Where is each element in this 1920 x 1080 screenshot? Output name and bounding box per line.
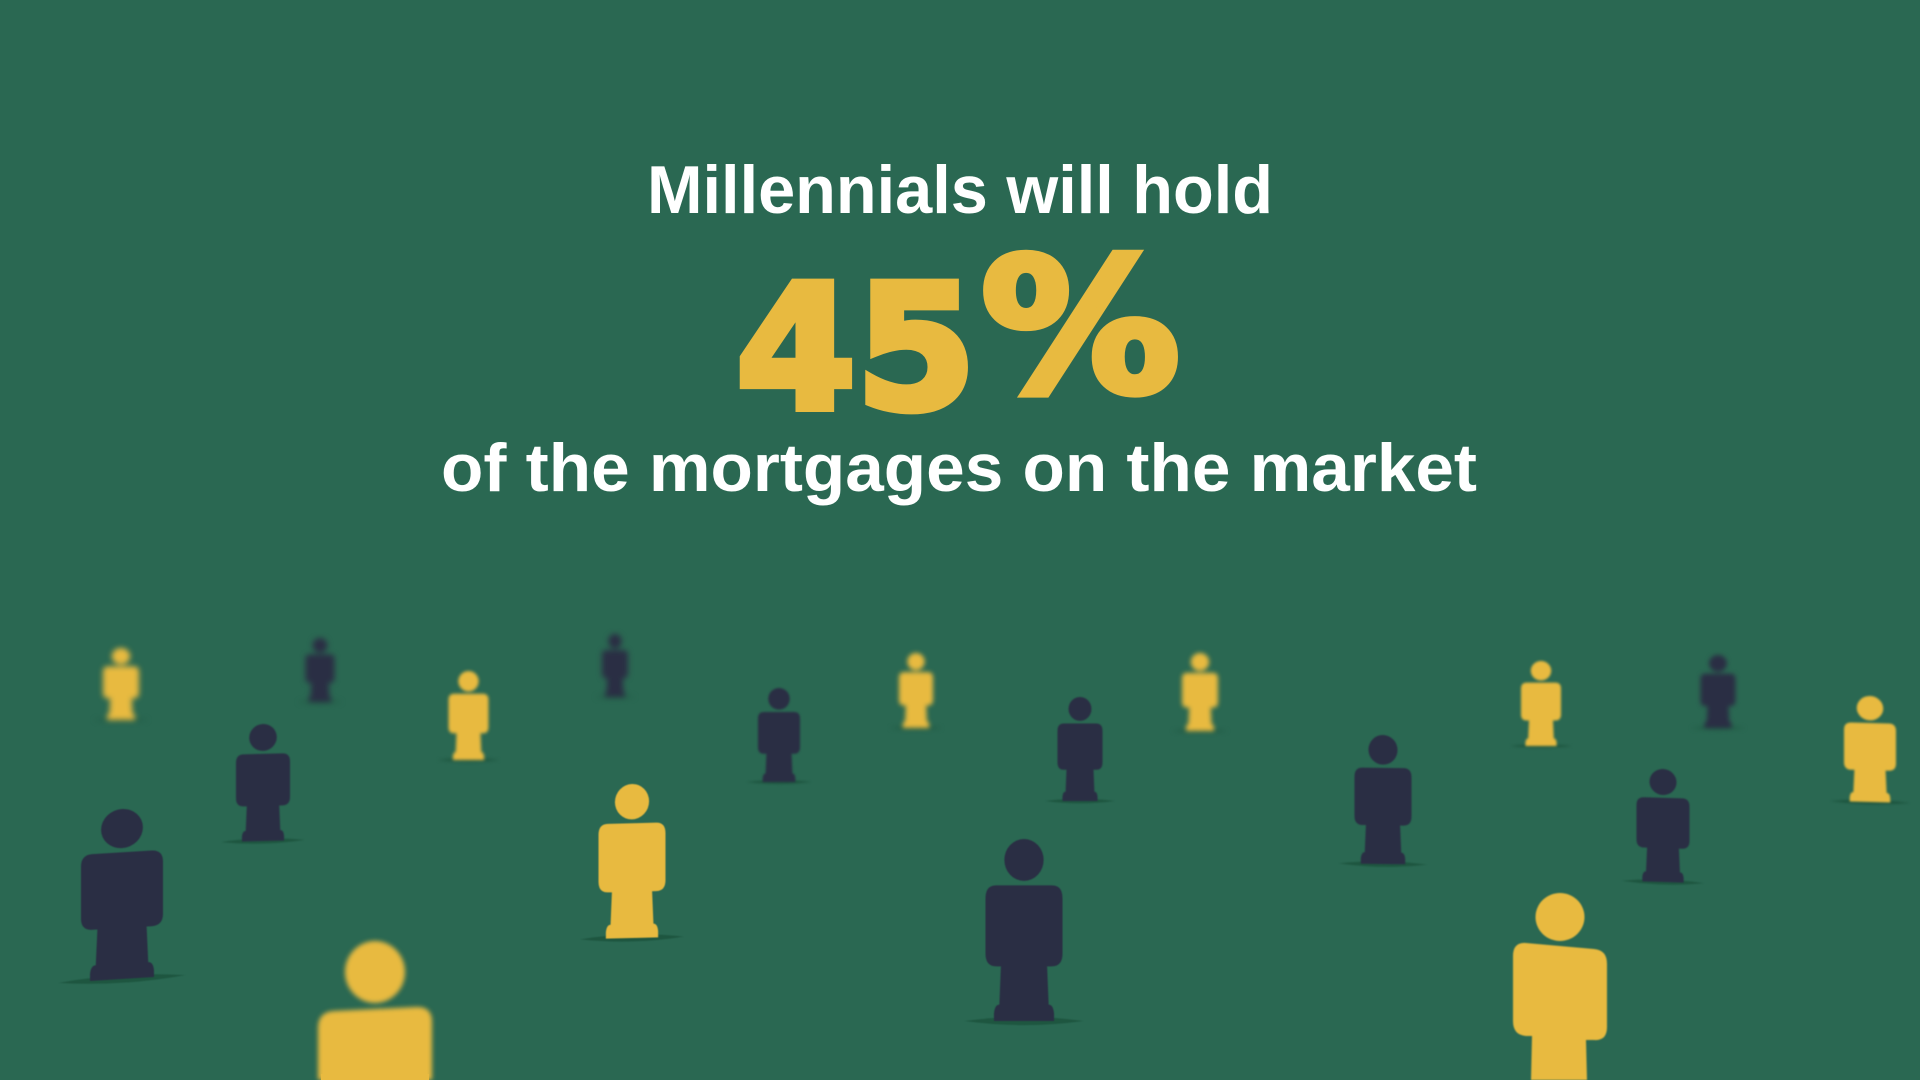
figure: navy 5 [221, 723, 305, 845]
figure: navy 9 [747, 688, 811, 784]
figure: far yellow 13 [1172, 653, 1228, 733]
big number: 45%: 45 [736, 248, 976, 449]
figure: far navy 2 [298, 638, 342, 703]
figure: yellow right edge [1830, 695, 1910, 805]
figure: yellow 14 [1510, 661, 1572, 748]
figure: big blurred yellow bottom left [318, 941, 432, 1080]
figure: big navy centre [965, 839, 1083, 1025]
figure: navy 17 [1339, 734, 1427, 868]
big number: 45%: % [981, 219, 1180, 435]
figure: yellow centre-left [580, 783, 684, 943]
heading: last line: of the mortgages on the market [441, 430, 1477, 506]
big number: 45% [736, 219, 1180, 449]
figure: navy 18 [1622, 768, 1704, 886]
figure: navy 11 [1045, 697, 1115, 803]
figure: yellow 4 [438, 671, 499, 762]
figure: far yellow 1 [93, 648, 149, 722]
figure: big navy left [59, 805, 185, 987]
heading: first line: Millennials will hold [647, 152, 1273, 228]
figure: big yellow bottom right [1513, 893, 1607, 1080]
crowd of figures [59, 634, 1910, 1080]
figure: far yellow 10 [890, 653, 942, 730]
figure: far navy 15 [1691, 655, 1745, 730]
figure: far navy 3 [595, 634, 635, 698]
